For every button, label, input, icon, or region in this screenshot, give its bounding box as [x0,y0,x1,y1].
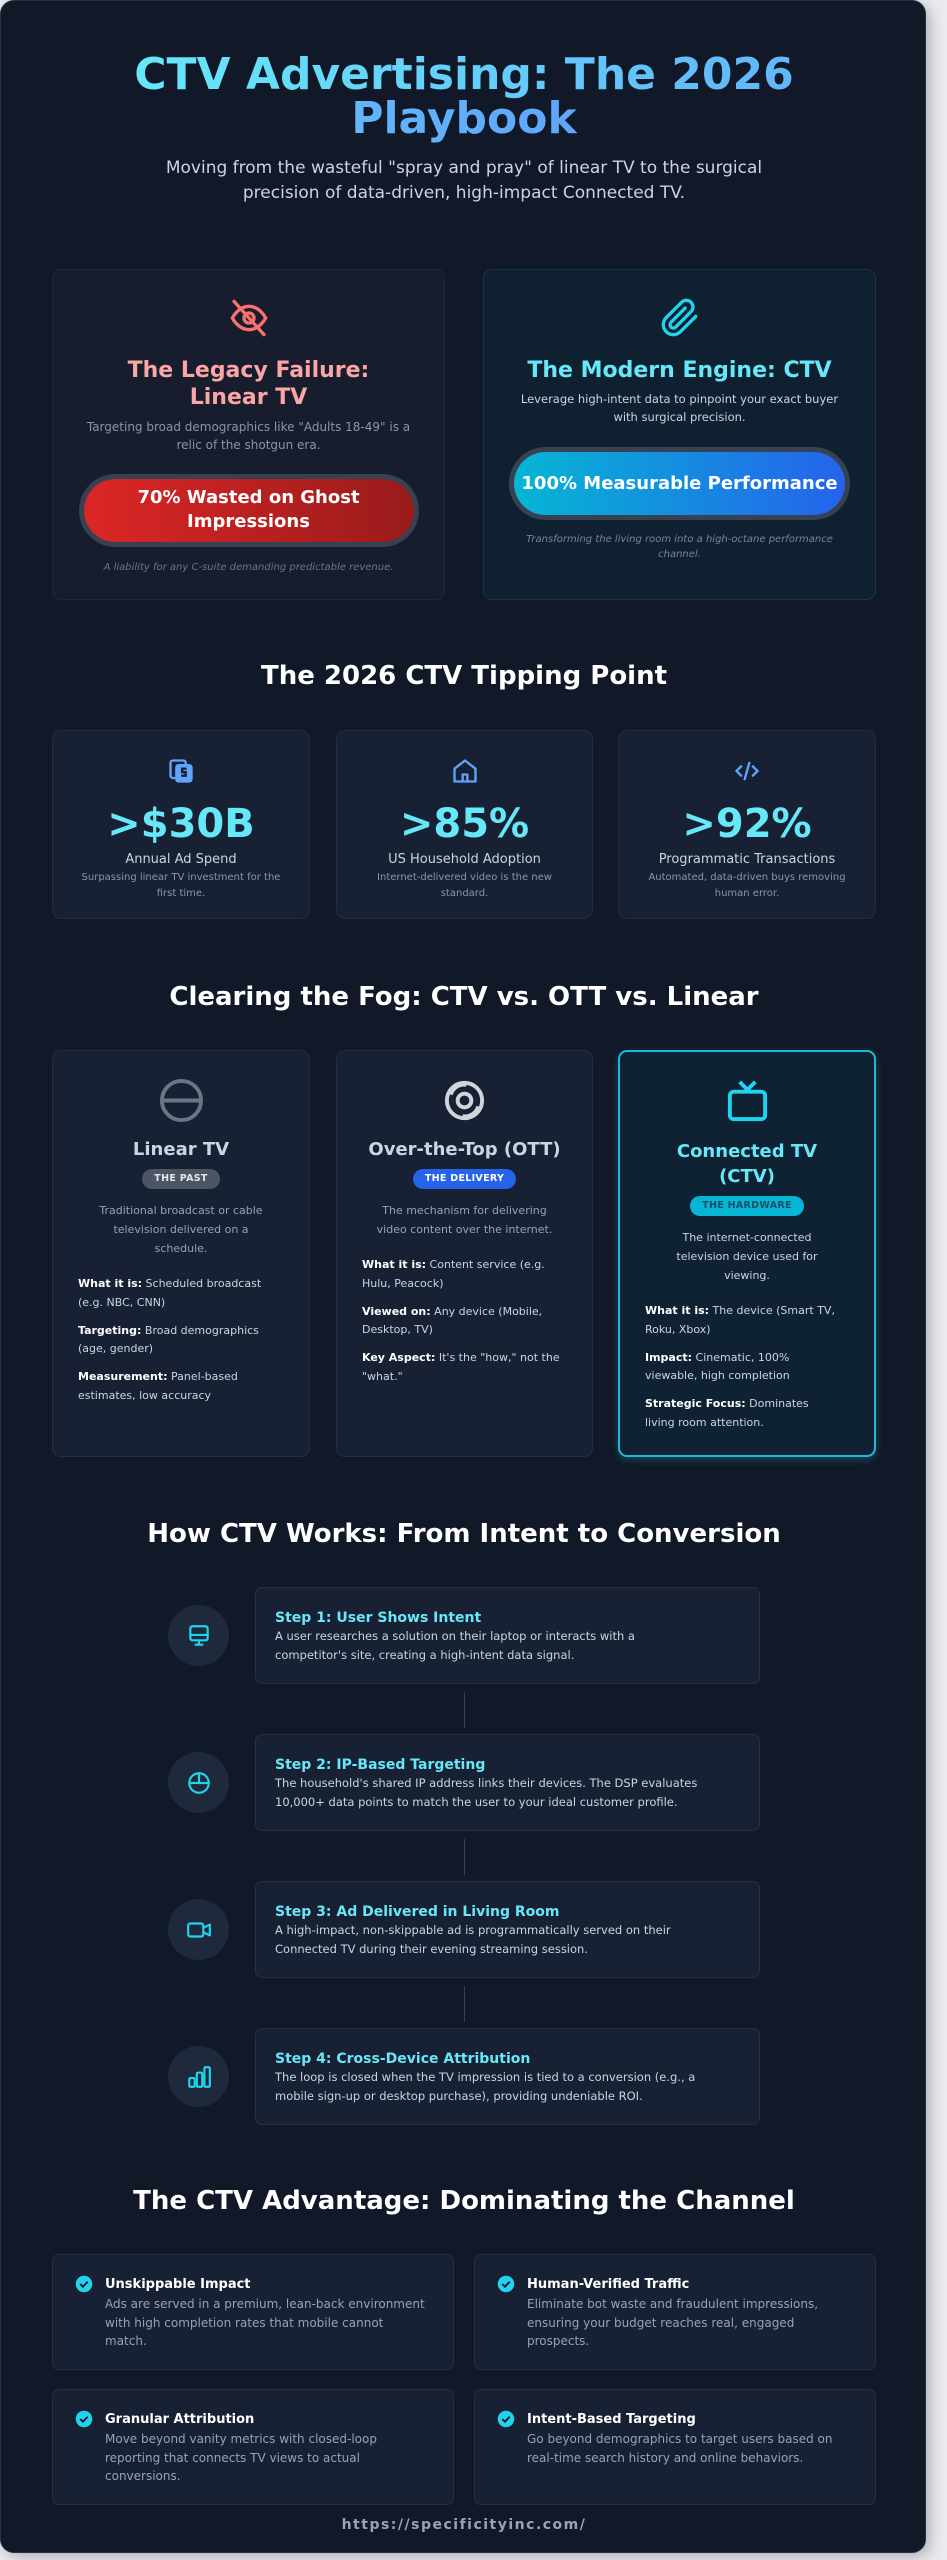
icon: eye-off [230,300,268,336]
heading: tipping point: The 2026 CTV Tipping Point [261,661,667,691]
icon: circle divided [160,1079,203,1122]
card: ctv (highlighted) [618,1050,876,1457]
card: linear tv: Targeting: Broad demographics (age, gender) [78,1324,259,1355]
stat: household adoption: Internet-delivered video is the new standard. [377,872,552,899]
card: ctv (highlighted): THE HARDWARE [702,1200,792,1211]
advantage: granular attribution: conversions. [105,2469,181,2483]
icon: streaming disc [444,1080,484,1120]
advantage: granular attribution: Move beyond vanity metrics with closed-loop [105,2432,377,2446]
advantage: unskippable: Unskippable Impact [105,2277,251,2292]
card: ctv (highlighted): Connected TV [677,1141,817,1162]
card: ott: Viewed on: Any device (Mobile, Desktop, TV) [362,1304,542,1336]
stat: ad spend: Annual Ad Spend [125,852,237,867]
card: ctv (highlighted): Strategic Focus: Dominates living room attention. [645,1397,809,1428]
card: ctv (highlighted): (CTV) [719,1166,775,1187]
advantage: human verified: Human-Verified Traffic [527,2277,689,2292]
card: linear tv: What it is: Scheduled broadcast (e.g. NBC, CNN) [78,1277,261,1308]
step 4 [255,2028,760,2125]
card: ctv (highlighted): The internet-connected television device used for viewing. [676,1231,818,1282]
step 1: competitor's site, creating a high-intent data signal. [275,1648,574,1662]
advantage: human verified: prospects. [527,2334,589,2348]
step 2: 10,000+ data points to match the user to your ideal customer profile. [275,1794,678,1808]
subtitle: Moving from the wasteful "spray and pray" of linear TV to the surgical precision of data-driven, high-impact Connected TV. [166,158,762,203]
italic note: A liability for any C-suite demanding predictable revenue. [104,562,393,573]
description: Leverage high-intent data to pinpoint your exact buyer with surgical precision. [521,392,838,424]
advantage: intent targeting: Go beyond demographics to target users based on [527,2432,832,2446]
title [134,49,794,144]
card: linear tv: Traditional broadcast or cable television delivered on a schedule. [99,1204,263,1255]
stat: ad spend: Surpassing linear TV investment for the first time. [82,872,280,899]
step 4: mobile sign-up or desktop purchase), providing undeniable ROI. [275,2088,643,2102]
step 3: Step 3: Ad Delivered in Living Room [275,1904,560,1920]
italic note: Transforming the living room into a high-octane performance channel. [526,534,833,560]
icon: money [169,759,193,783]
stat: household adoption: US Household Adoption [388,852,541,867]
advantage: unskippable: Ads are served in a premium, lean-back environment [105,2297,425,2311]
advantage: granular attribution [52,2389,454,2505]
description: Targeting broad demographics like "Adults 18-49" is a relic of the shotgun era. [87,420,410,452]
card: ott: The mechanism for delivering video content over the internet. [377,1204,552,1236]
heading: The Modern Engine: CTV [527,358,832,383]
title: CTV Advertising: The 2026 [134,49,794,100]
stat: programmatic [618,730,876,919]
advantage: human verified: Eliminate bot waste and fraudulent impressions, [527,2297,818,2311]
stat: household adoption [336,730,593,919]
stat: programmatic: Programmatic Transactions [659,852,835,867]
panel: legacy failure [52,269,445,600]
heading: how ctv works: How CTV Works: From Intent to Conversion [147,1519,781,1549]
stat: programmatic: >92% [682,801,812,847]
advantage: human verified [474,2254,876,2370]
step 2 icon [168,1752,229,1813]
heading: clearing the fog: Clearing the Fog: CTV vs. OTT vs. Linear [169,982,759,1012]
icon: tv [728,1080,768,1122]
advantage: human verified: ensuring your budget reaches real, engaged [527,2316,794,2330]
step 2: The household's shared IP address links their devices. The DSP evaluates [275,1776,697,1790]
step 1: A user researches a solution on their laptop or interacts with a [275,1629,635,1643]
step 1: Step 1: User Shows Intent [275,1610,481,1626]
card: ctv (highlighted): Impact: Cinematic, 100% viewable, high completion [645,1350,790,1382]
heading: The Legacy Failure: [128,358,369,383]
advantage: unskippable: with high completion rates that mobile cannot [105,2316,383,2330]
card: ctv (highlighted): What it is: The device (Smart TV, Roku, Xbox) [645,1304,835,1336]
card: ott: Over-the-Top (OTT) [368,1139,561,1160]
icon: code [735,762,759,780]
red pill: Impressions [187,511,310,532]
stat: ad spend: >$30B [107,801,255,847]
step 4 icon [168,2046,229,2107]
step 2 [255,1734,760,1831]
card: linear tv [52,1050,310,1457]
heading: Linear TV [190,385,307,410]
advantage: unskippable [52,2254,454,2370]
step 1 [255,1587,760,1684]
advantage: intent targeting: Intent-Based Targeting [527,2412,696,2427]
step 4: The loop is closed when the TV impression is tied to a conversion (e.g., a [275,2070,695,2084]
heading [128,358,369,410]
step 4: Step 4: Cross-Device Attribution [275,2051,530,2067]
step 3: Connected TV during their evening streaming session. [275,1942,588,1956]
advantage: granular attribution: reporting that connects TV views to actual [105,2450,360,2464]
card: ott [336,1050,593,1457]
step 3 icon [168,1899,229,1960]
blue pill: 100% Measurable Performance [521,473,838,494]
stat: programmatic: Automated, data-driven buys removing human error. [648,872,846,899]
icon: paperclip [662,298,698,336]
footer url: https://specificityinc.com/ [342,2517,586,2533]
advantage: intent targeting [474,2389,876,2505]
card: ott: THE DELIVERY [425,1173,504,1184]
card: ott: Key Aspect: It's the "how," not the "what." [362,1351,560,1382]
card: linear tv: Measurement: Panel-based estimates, low accuracy [78,1370,238,1402]
red pill [78,474,418,547]
advantage: unskippable: match. [105,2334,147,2348]
title: Playbook [351,93,577,144]
panel: modern engine [483,269,876,600]
blue pill [509,447,850,520]
card: linear tv: Linear TV [133,1139,229,1160]
step 3 [255,1881,760,1978]
stat: ad spend [52,730,310,919]
stat: household adoption: >85% [400,801,529,847]
step 3: A high-impact, non-skippable ad is programmatically served on their [275,1923,671,1937]
step 2: Step 2: IP-Based Targeting [275,1757,485,1773]
card: ott: What it is: Content service (e.g. Hulu, Peacock) [362,1258,545,1290]
icon: house [453,759,477,783]
heading: ctv advantage: The CTV Advantage: Dominating the Channel [133,2186,795,2216]
advantage: intent targeting: real-time search history and online behaviors. [527,2450,803,2464]
step 1 icon [168,1605,229,1666]
card: linear tv: THE PAST [154,1173,208,1184]
advantage: granular attribution: Granular Attribution [105,2412,254,2427]
red pill: 70% Wasted on Ghost [137,487,360,508]
